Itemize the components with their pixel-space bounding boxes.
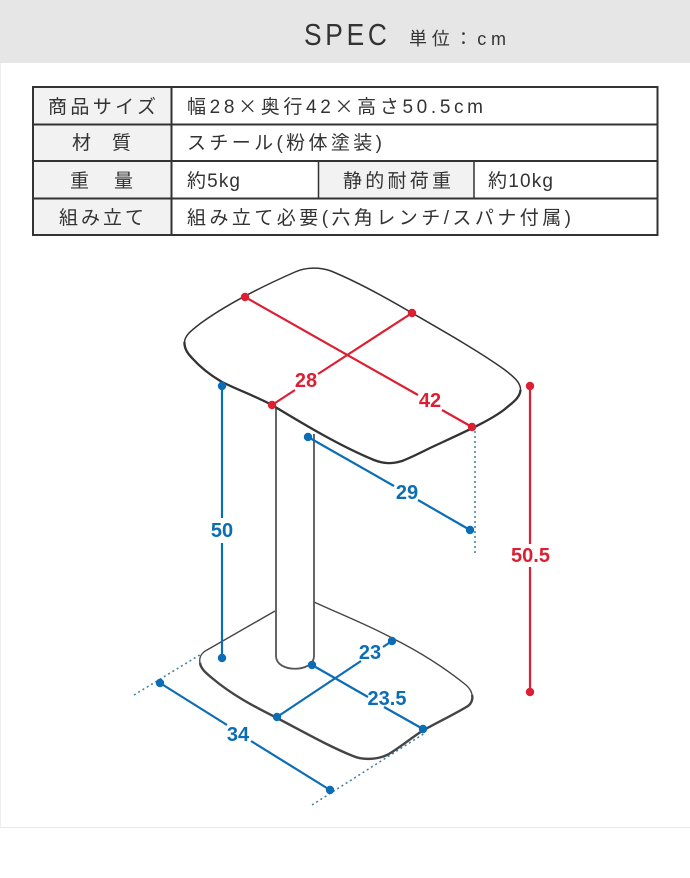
dimension: base 23: [273, 637, 396, 721]
footer rule: [0, 827, 690, 828]
spec table: [33, 87, 658, 235]
guide: vertical dotted: [474, 431, 476, 556]
row: weight: 静的耐荷重: [343, 170, 451, 192]
guide: base dotted right: [312, 733, 425, 805]
dimension: total height 50.5: 50.5: [511, 545, 550, 567]
row: weight: 重量: [70, 170, 133, 192]
table illustration: [184, 268, 521, 759]
row: size: 商品サイズ: [48, 96, 156, 118]
dimension: under-top height 50: 50: [211, 520, 233, 542]
dimension: clearance 29: [304, 433, 474, 534]
unit note: 単位：cm: [409, 29, 506, 49]
row: material: 材質: [72, 132, 131, 154]
dimension: top depth 42: [241, 293, 476, 431]
table top: [184, 268, 521, 463]
dimension: base 23.5: [308, 661, 427, 733]
row: weight: [70, 170, 553, 192]
row: material: [72, 132, 382, 154]
row: size: 幅28×奥行42×高さ50.5cm: [187, 92, 483, 119]
dimension: base 34: 34: [227, 724, 250, 746]
dimension: top depth 42: 42: [419, 390, 441, 412]
row: size: [48, 92, 483, 119]
dimension: top width 28: [268, 309, 416, 409]
pole: [276, 405, 314, 669]
dimension: total height 50.5: [511, 382, 550, 696]
row: weight: 約10kg: [488, 170, 553, 192]
dimension: top width 28: 28: [295, 370, 317, 392]
dimension: clearance 29: 29: [396, 482, 418, 504]
heading: SPEC: SPEC: [304, 18, 387, 53]
page edge: [0, 63, 1, 828]
dimension: base 23.5: 23.5: [368, 688, 406, 710]
dimension: base 34: [156, 679, 334, 794]
row: assembly: 組み立て必要(六角レンチ/スパナ付属): [187, 207, 571, 229]
row: material: スチール(粉体塗装): [187, 132, 382, 154]
base plate: [200, 602, 472, 759]
dimension: under-top height 50: [211, 382, 233, 662]
guide: base dotted left: [134, 653, 203, 695]
row: weight: 約5kg: [187, 170, 240, 192]
dimension: base 23: 23: [359, 642, 381, 664]
row: assembly: 組み立て: [59, 207, 144, 229]
header band: [0, 0, 690, 63]
